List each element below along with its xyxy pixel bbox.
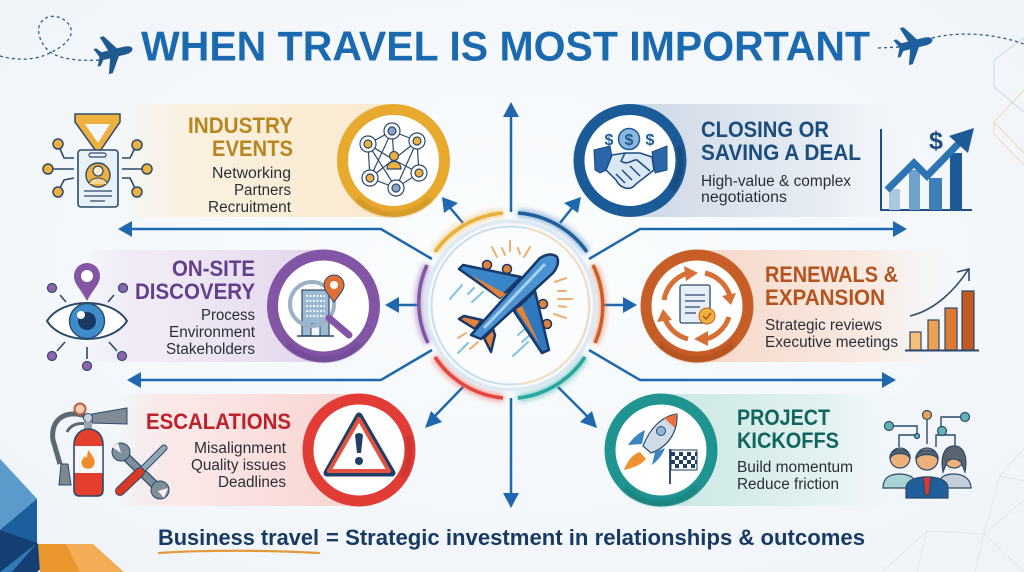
hub glow arcs [419, 213, 603, 398]
corner decoration: top right outlines [994, 38, 1024, 165]
corner decoration: bottom left polygons [0, 459, 124, 572]
text: industry events list: Networking [212, 165, 291, 182]
icon: fire extinguisher [53, 404, 127, 496]
hub disc [426, 222, 594, 390]
central hub with plane [419, 213, 603, 398]
panel: renewals and expansion [646, 250, 979, 362]
text: on-site discovery heading [135, 256, 255, 304]
icon: badge with lanyard [43, 114, 152, 207]
plane fuselage [471, 254, 558, 339]
footer statement: = Strategic investment in relationships & outcomes [326, 525, 865, 550]
text: closing description: High-value & complex [701, 173, 851, 190]
hub coloured arcs [419, 213, 603, 398]
icon: left plane with dashed flight path [0, 16, 137, 76]
icon: handshake circle: $ [605, 132, 614, 149]
text: on-site discovery list: Environment [169, 324, 256, 341]
icon: handshake circle: $ [646, 132, 655, 149]
text: on-site discovery list [166, 307, 256, 358]
icon: warning circle [308, 399, 410, 501]
icon: wrench and screwdriver [112, 443, 169, 499]
text: industry events list: Recruitment [208, 199, 292, 216]
text: renewals heading: RENEWALS & [765, 262, 898, 287]
text: closing heading: CLOSING OR [701, 117, 829, 142]
arrowheads [118, 102, 907, 508]
text: on-site discovery list: Stakeholders [166, 341, 255, 358]
text: project kickoffs heading: PROJECT [737, 405, 830, 430]
panel background [661, 394, 906, 506]
panel: closing or saving a deal [579, 104, 974, 217]
text: project kickoffs heading: KICKOFFS [737, 428, 839, 453]
text: renewals list: Strategic reviews [765, 317, 882, 334]
chart icon: growth bars [905, 269, 979, 350]
text: escalations list [191, 440, 287, 491]
text: industry events heading: EVENTS [212, 136, 293, 161]
arrows from centre to panels [128, 112, 896, 498]
text: closing heading [701, 117, 861, 165]
text: escalations list: Quality issues [191, 457, 286, 474]
panel background [697, 250, 952, 362]
text: on-site discovery heading: ON-SITE [172, 256, 255, 281]
panel: project kickoffs [610, 394, 971, 506]
text: renewals list [765, 317, 898, 351]
text: on-site discovery list: Process [201, 307, 255, 324]
text: closing description [701, 173, 851, 206]
text: closing heading: SAVING A DEAL [701, 140, 861, 165]
panel background [120, 394, 362, 506]
panel background [628, 104, 913, 217]
text: project kickoffs list: Reduce friction [737, 476, 839, 493]
text: escalations list: Misalignment [194, 440, 287, 457]
text: industry events heading [188, 113, 293, 161]
text: industry events heading: INDUSTRY [188, 113, 293, 138]
icon: handshake circle [579, 110, 681, 212]
icon: right plane with dashed flight path [878, 21, 1024, 67]
panel background [85, 250, 325, 362]
panel: escalations [53, 394, 410, 506]
text: closing description: negotiations [701, 189, 787, 206]
plane rays and speed lines [450, 241, 572, 356]
text: renewals heading [765, 262, 898, 310]
icon: network circle [342, 110, 444, 214]
text: project kickoffs list [737, 459, 853, 493]
panel: on-site discovery [47, 250, 374, 370]
icon: eye with pin [47, 263, 128, 370]
text: on-site discovery heading: DISCOVERY [135, 279, 255, 304]
corner decoration: bottom right network [882, 449, 1024, 572]
chart icon: rising deal chart: $ [929, 127, 943, 155]
footer statement [158, 525, 865, 553]
text: project kickoffs list: Build momentum [737, 459, 853, 476]
text: renewals list: Executive meetings [765, 334, 898, 351]
footer statement: Business travel [158, 525, 319, 550]
text: escalations heading: ESCALATIONS [146, 409, 291, 434]
text: industry events list: Partners [234, 182, 291, 199]
plane engines [482, 260, 552, 328]
chart icon: rising deal chart [881, 127, 974, 210]
text: industry events list [208, 165, 292, 216]
panel: industry events [43, 104, 444, 217]
icon: renewal cycle circle [646, 255, 748, 359]
title: WHEN TRAVEL IS MOST IMPORTANT [141, 22, 870, 70]
plane wings and tail [459, 265, 549, 353]
icon: team with network [883, 410, 971, 498]
panel background [120, 104, 395, 217]
icon: building magnifier circle [272, 255, 374, 359]
text: project kickoffs heading [737, 405, 839, 453]
icon: rocket and flag circle [610, 399, 712, 503]
text: renewals heading: EXPANSION [765, 285, 885, 310]
text: escalations list: Deadlines [218, 474, 286, 491]
icon: handshake circle: $ [625, 132, 634, 149]
